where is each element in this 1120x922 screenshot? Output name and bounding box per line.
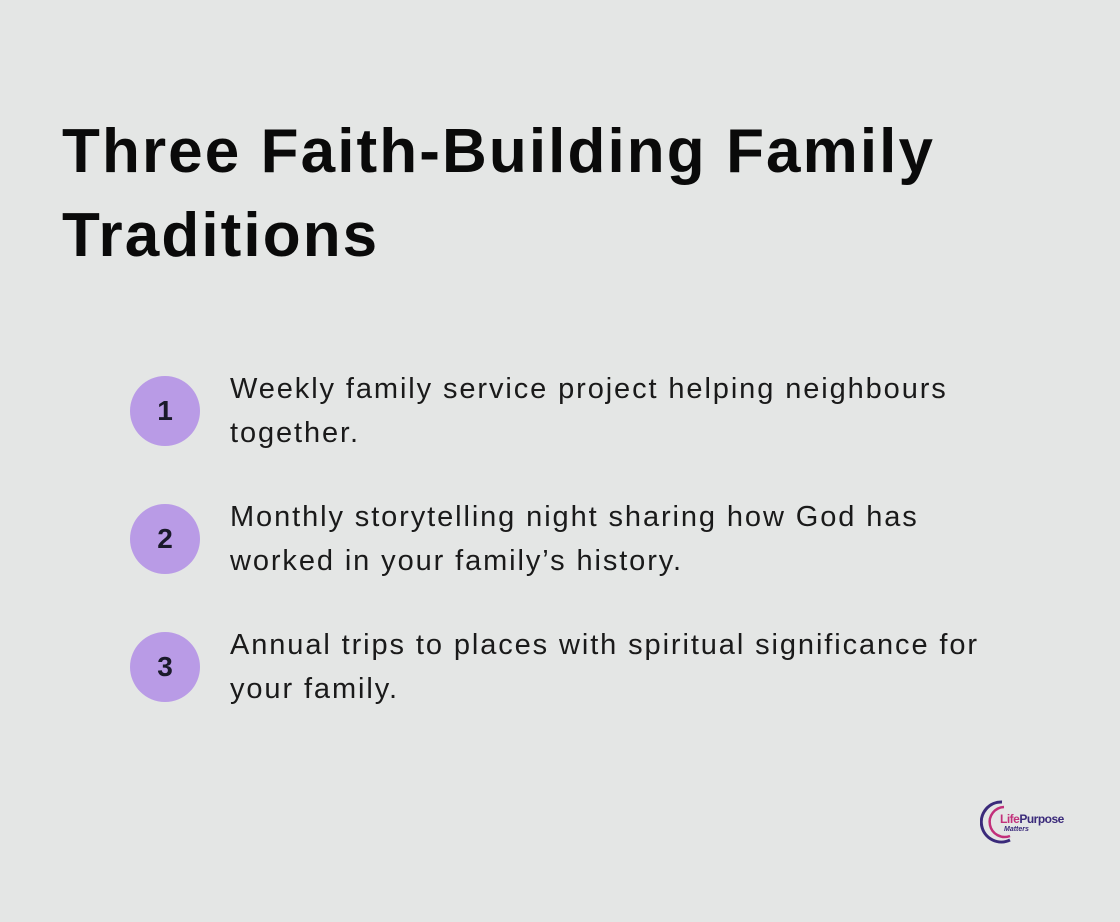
number circle 3: 3 (157, 651, 173, 682)
title: Three Faith-Building Family (62, 117, 935, 186)
logo (980, 800, 1064, 844)
item 3 (130, 629, 979, 705)
number circle 2: 2 (157, 523, 173, 554)
text 1: Weekly family service project helping neighbours (230, 373, 948, 405)
text 1: together. (230, 417, 360, 449)
text 2 (230, 501, 919, 577)
title: Traditions (62, 201, 379, 270)
number circle 1 (130, 376, 200, 446)
text 2: Monthly storytelling night sharing how God has (230, 501, 919, 533)
item 2 (130, 501, 919, 577)
text 1 (230, 373, 948, 449)
title (62, 117, 935, 270)
item 1 (130, 373, 948, 449)
number circle 2 (130, 504, 200, 574)
text 2: worked in your family’s history. (230, 545, 683, 577)
logo: Matters (1004, 826, 1029, 833)
text 3: your family. (230, 673, 399, 705)
logo: LifePurpose (1000, 812, 1064, 826)
number circle 1: 1 (157, 395, 173, 426)
text 3 (230, 629, 979, 705)
text 3: Annual trips to places with spiritual significance for (230, 629, 979, 661)
number circle 3 (130, 632, 200, 702)
